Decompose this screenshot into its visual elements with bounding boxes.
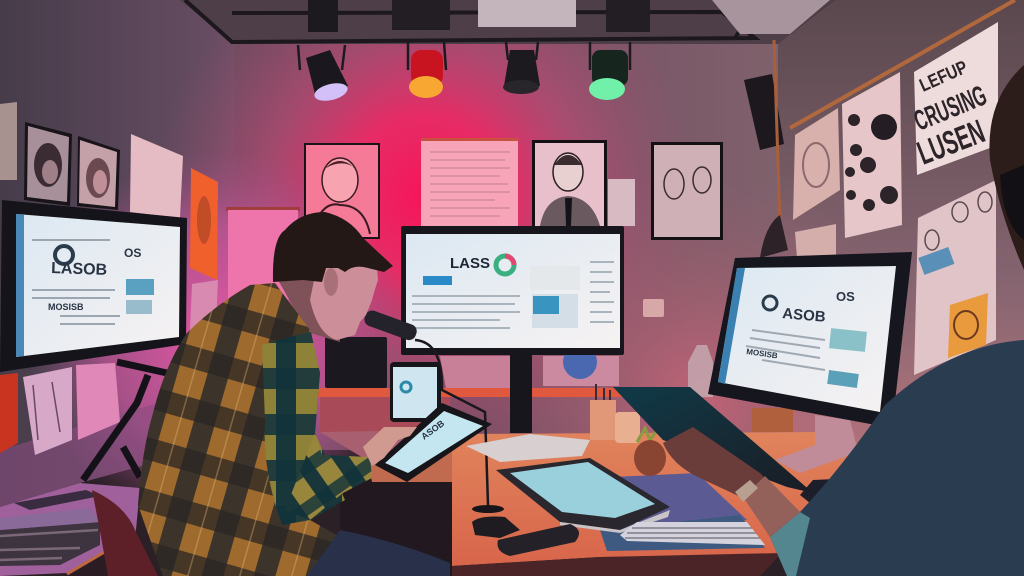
monitor: left xyxy=(0,200,187,372)
keyboard xyxy=(620,522,765,545)
clutter on desk xyxy=(466,345,793,476)
neck xyxy=(277,270,340,342)
forearm xyxy=(743,476,800,537)
left wall art xyxy=(0,102,300,330)
wall light glow xyxy=(30,0,930,510)
sleeve cuff xyxy=(770,512,810,576)
right wall posters xyxy=(760,22,998,375)
poster headline: LEFUP xyxy=(916,57,971,96)
poster headline xyxy=(909,57,991,172)
bracelet xyxy=(735,480,758,502)
monitor: right xyxy=(708,252,912,473)
tablet: on desk xyxy=(496,458,670,533)
headphones xyxy=(1000,165,1024,240)
monitor: center: LASS xyxy=(450,255,490,272)
phone and mouse xyxy=(472,517,579,556)
hand xyxy=(363,427,417,466)
spotlight: green xyxy=(589,42,630,100)
monitor: center xyxy=(401,226,624,433)
tablet: held xyxy=(375,403,492,482)
right wall xyxy=(778,0,1024,470)
wall speaker xyxy=(744,74,784,150)
dark keyboard behind xyxy=(800,478,857,515)
chair xyxy=(92,490,158,576)
lighting rig xyxy=(185,0,830,42)
tablet: held: ASOB xyxy=(419,418,447,442)
spotlight: purple xyxy=(298,45,349,104)
monitor: left: OS xyxy=(124,246,141,260)
wooden rail and cable xyxy=(790,0,1015,128)
arm and hand xyxy=(663,427,800,537)
jeans xyxy=(307,530,450,576)
hair xyxy=(273,212,393,282)
person: foreground right xyxy=(663,65,1024,576)
poster headline: CRUSING xyxy=(909,79,991,137)
tablet: on shelf xyxy=(390,362,441,422)
face xyxy=(310,250,378,340)
back wall xyxy=(230,0,790,450)
desk xyxy=(320,430,872,576)
monitor: right: MOSISB xyxy=(746,347,778,360)
shelf under monitor xyxy=(318,337,626,433)
person: seated man xyxy=(138,212,450,576)
hair xyxy=(989,65,1024,270)
ear xyxy=(324,268,338,296)
poster headline: LUSEN xyxy=(912,112,990,172)
arm sleeve forearm xyxy=(285,433,372,520)
monitor: right: OS xyxy=(836,289,855,304)
tablet: held by right person xyxy=(613,387,813,493)
ceiling xyxy=(180,0,835,44)
monitor: left: LASOB xyxy=(51,260,107,279)
lower left wall tint xyxy=(0,380,235,507)
center wall art xyxy=(304,138,723,317)
arm sleeve upper xyxy=(262,332,345,525)
spotlight: red xyxy=(408,42,446,98)
lower left wall sheets xyxy=(0,345,619,455)
left wall xyxy=(0,0,235,507)
microphone and boom xyxy=(362,309,504,513)
monitor stand: left xyxy=(83,362,167,480)
monitor: right: ASOB xyxy=(782,305,826,326)
torso plaid shirt xyxy=(138,283,340,576)
sweater xyxy=(770,340,1024,576)
monitor: left: MOSISB xyxy=(48,302,84,312)
spotlight: black xyxy=(503,42,540,94)
books: left stack xyxy=(0,483,140,576)
